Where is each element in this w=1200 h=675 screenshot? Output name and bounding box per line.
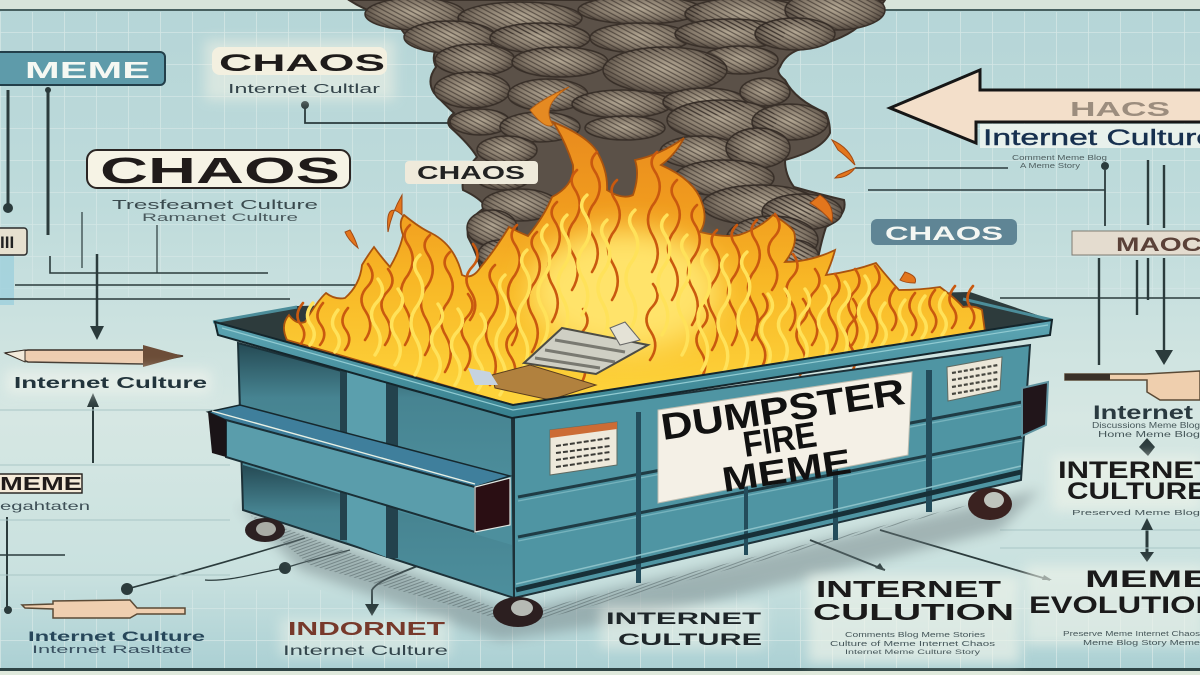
label: INDORNET: Internet Culture <box>283 642 448 658</box>
debris in the dumpster <box>468 322 648 400</box>
label: MAOC right <box>1072 231 1200 256</box>
label: MEME EVOLUTION: MEME <box>1085 566 1200 593</box>
label: MEME EVOLUTION: Meme Blog Story Meme <box>1083 640 1200 647</box>
flame core glow <box>530 230 720 350</box>
smoke column <box>349 0 885 276</box>
big left arrow with label: Comment Meme Blog <box>1012 155 1107 162</box>
label: INTERNET CULTURE center: CULTURE <box>618 630 762 649</box>
tab left: III <box>0 233 14 252</box>
label: INTERNET CULUTION: CULUTION <box>813 599 1014 625</box>
label: MEME EVOLUTION <box>1025 565 1200 647</box>
label: INTERNET CULUTION: Culture of Meme Internet Chaos <box>830 641 996 648</box>
label: CHAOS large: Tresfeamet Culture <box>112 197 318 212</box>
flying embers <box>345 140 916 283</box>
label: Internet Culture lower left: Internet Culture <box>28 628 205 644</box>
pointer: pencil left lower <box>22 600 185 618</box>
label: MEME EVOLUTION: Preserve Meme Internet Chaos <box>1063 631 1200 638</box>
label: Internet right: Internet <box>1093 403 1194 424</box>
label: CHAOS top: CHAOS <box>219 50 385 77</box>
label: MEME top left: MEME <box>25 57 150 83</box>
label: MEME top left <box>0 52 165 85</box>
big left arrow with label: A Meme Story <box>1020 163 1081 170</box>
dumpster sign: MEME <box>719 442 854 500</box>
connector lines and arrows <box>0 87 1200 616</box>
label: Internet right <box>1092 403 1200 439</box>
label: INTERNET CULTURE center <box>600 605 765 649</box>
bright flame strands <box>307 195 946 395</box>
label: INTERNET CULUTION: Internet Meme Culture Story <box>845 650 980 656</box>
label: CHAOS large <box>87 150 350 224</box>
label: CHAOS center: CHAOS <box>417 163 525 183</box>
shadow under dumpster <box>238 490 1040 640</box>
warning sticker right <box>947 357 1002 401</box>
dumpster sign: FIRE <box>740 413 819 465</box>
wisp flame on smoke <box>530 87 569 126</box>
label: Internet right: Discussions Meme Blog <box>1092 421 1200 430</box>
label: INDORNET <box>280 618 450 658</box>
label: INTERNET CULTURE right: INTERNET <box>1058 457 1200 484</box>
dark flame strands <box>297 152 974 385</box>
flames <box>284 87 985 405</box>
big left arrow with label: HACS <box>1070 99 1170 121</box>
pointing hand right <box>1065 371 1200 400</box>
pointer: pencil left upper <box>5 345 183 367</box>
label: CHAOS right teal: CHAOS <box>885 224 1003 245</box>
label: INTERNET CULTURE right <box>1052 455 1200 517</box>
label: INDORNET: INDORNET <box>288 619 445 639</box>
label: CHAOS right teal <box>871 219 1017 245</box>
big left arrow with label <box>890 70 1200 170</box>
dumpster left face <box>238 343 514 598</box>
label: Internet Culture lower left <box>28 628 205 656</box>
label: CHAOS top: Internet Cultlar <box>228 81 381 96</box>
dumpster interior back <box>213 292 1052 405</box>
label: CHAOS large: Ramanet Culture <box>142 212 298 224</box>
label: MEME left <box>0 474 90 513</box>
tab left <box>0 228 27 255</box>
label: CHAOS large: CHAOS <box>100 150 340 191</box>
label: Internet right: Home Meme Blog <box>1098 430 1200 439</box>
wheel: right <box>968 488 1012 520</box>
label: INTERNET CULTURE right: CULTURE <box>1067 478 1200 505</box>
warning sticker left <box>550 422 617 475</box>
dumpster <box>208 320 1052 627</box>
label: INTERNET CULUTION: INTERNET <box>816 576 1001 602</box>
label: MAOC right: MAOC <box>1116 235 1200 256</box>
dumpster sign: DUMPSTER <box>658 371 907 448</box>
dumpster rim <box>215 320 1052 418</box>
label: MEME left: MEME <box>0 474 82 494</box>
label: INTERNET CULTURE center: INTERNET <box>606 609 762 628</box>
dumpster sign <box>658 371 912 503</box>
dumpster side beam <box>208 405 510 532</box>
label: Internet Culture lower left: Internet Rasltate <box>32 644 192 656</box>
label: INTERNET CULTURE right: Preserved Meme Blog <box>1072 510 1200 517</box>
label: Internet Culture left <box>6 370 211 394</box>
label: INTERNET CULUTION <box>808 575 1020 663</box>
wheel: front <box>493 597 543 627</box>
label: INTERNET CULUTION: Comments Blog Meme Stories <box>845 632 986 639</box>
label: MEME EVOLUTION: EVOLUTION <box>1029 592 1200 619</box>
wheel: left <box>245 518 285 542</box>
dumpster front face <box>514 345 1048 598</box>
label: MEME left: egahtaten <box>0 499 90 513</box>
label: CHAOS center <box>405 161 538 184</box>
label: Internet Culture left: Internet Culture <box>14 375 207 392</box>
big left arrow with label: Internet Culture <box>983 125 1200 150</box>
label: CHAOS top <box>205 40 395 100</box>
